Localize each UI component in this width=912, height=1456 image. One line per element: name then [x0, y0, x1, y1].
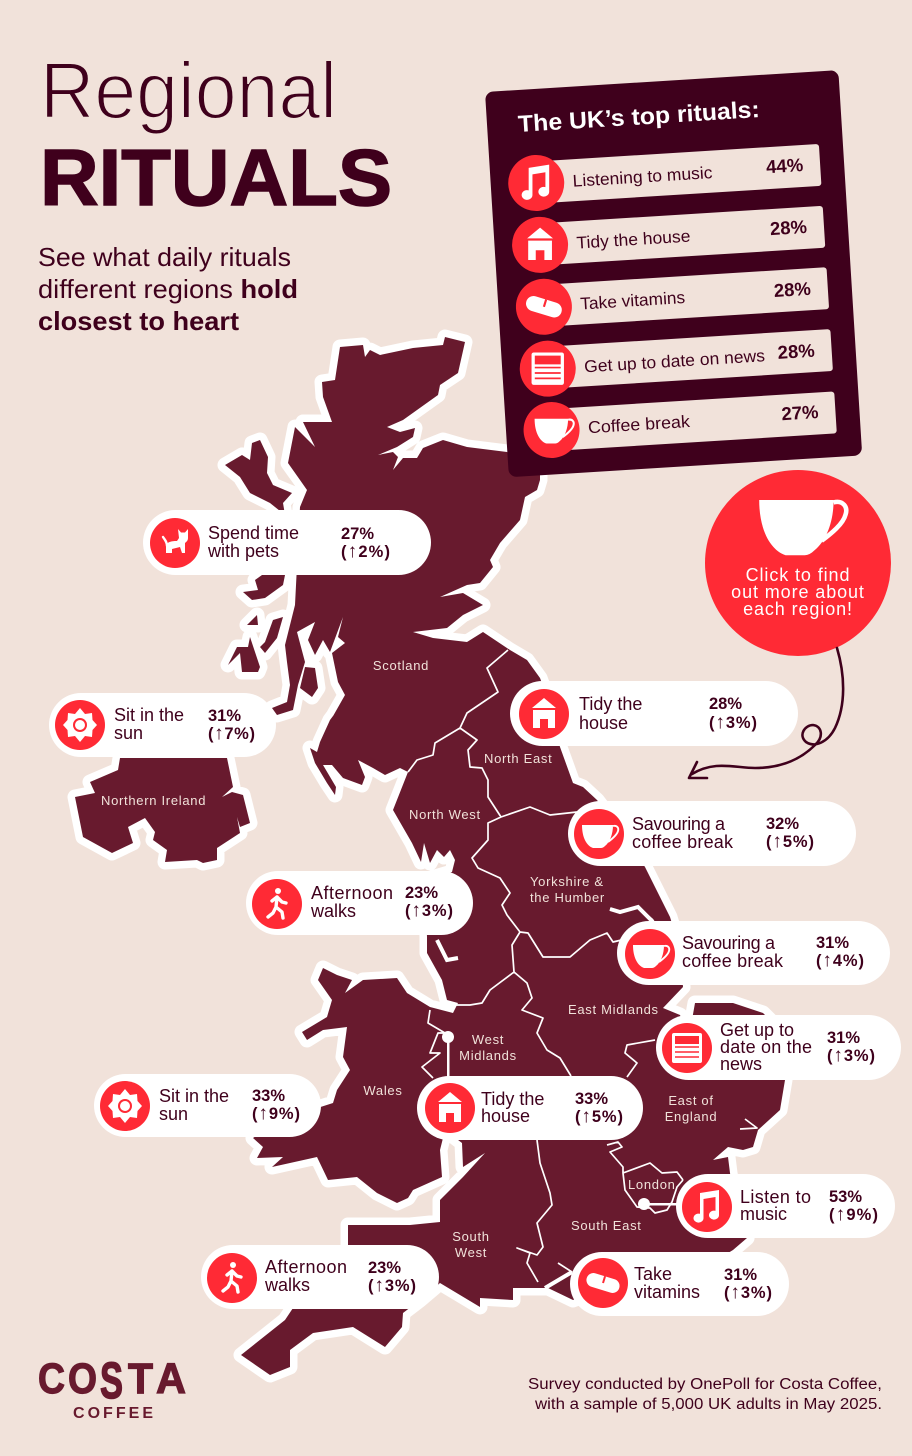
callout: Yorkshire savouring a coffee break: coffee break — [632, 832, 734, 852]
callout: West Midlands tidy the house: 33% — [575, 1090, 608, 1108]
region labels: England — [665, 1109, 717, 1124]
callout: Yorkshire savouring a coffee break: Savouring a — [632, 814, 726, 834]
callout: South East take vitamins — [570, 1252, 789, 1316]
callout: Yorkshire savouring a coffee break — [568, 801, 856, 866]
callout: Yorkshire savouring a coffee break: 32% — [766, 815, 799, 833]
callout: click to find out more: Click to find — [746, 565, 850, 585]
callout: Northern Ireland sit in the sun — [49, 693, 276, 757]
callout: East of England get up to date: (↑3%) — [827, 1045, 875, 1066]
row: get up to date on news: 28% — [777, 340, 815, 363]
callout: Scotland spend time with pets: 27% — [341, 525, 374, 543]
row: take vitamins: 28% — [773, 278, 811, 301]
callout: London listen to music — [676, 1174, 895, 1238]
callout: East Midlands savouring a coffee break: 31% — [816, 934, 849, 952]
callout: East of England get up to date: news — [720, 1054, 762, 1074]
row: get up to date on news: Get up to date on news — [584, 346, 765, 376]
row: coffee break: 27% — [781, 401, 819, 424]
row: take vitamins: Take vitamins — [580, 288, 686, 313]
callout: London listen to music: (↑9%) — [829, 1204, 878, 1225]
callout: click to find out more: each region! — [743, 599, 853, 619]
region labels: the Humber — [530, 890, 605, 905]
callout: North West afternoon walks: walks — [310, 901, 356, 921]
logo: Costa Coffee: O — [68, 1356, 97, 1403]
callout: Northern Ireland sit in the sun: Sit in the — [114, 705, 184, 725]
callout: Scotland spend time with pets: Spend time — [208, 523, 299, 543]
callout: East of England get up to date: Get up to — [720, 1020, 794, 1040]
region labels: North East — [484, 751, 552, 766]
region labels — [101, 658, 717, 1260]
region labels: Wales — [363, 1083, 403, 1098]
logo: Costa Coffee — [38, 1352, 186, 1422]
UK map — [75, 337, 790, 1375]
callout: North West afternoon walks: Afternoon — [311, 883, 393, 903]
logo: Costa Coffee: COFFEE — [73, 1405, 153, 1422]
row: listening to music: 44% — [765, 154, 804, 177]
callout: Northern Ireland sit in the sun: (↑7%) — [208, 723, 255, 744]
callout: East Midlands savouring a coffee break: (↑4%) — [816, 950, 864, 971]
callout: North West afternoon walks — [246, 871, 473, 935]
callout: Wales sit in the sun — [94, 1074, 321, 1137]
callout: West Midlands tidy the house: (↑5%) — [575, 1106, 623, 1127]
callout: South East take vitamins: (↑3%) — [724, 1282, 772, 1303]
callout: West Midlands tidy the house: Tidy the — [481, 1089, 544, 1109]
callout: West Midlands tidy the house — [417, 1076, 643, 1140]
callout: click to find out more: out more about — [731, 582, 865, 602]
logo: Costa Coffee: S — [100, 1352, 123, 1409]
title: RITUALS — [40, 133, 392, 222]
callout: Scotland spend time with pets: with pets — [207, 541, 279, 561]
region labels: North West — [409, 807, 481, 822]
callout: South West afternoon walks: Afternoon — [265, 1257, 347, 1277]
callout: London listen to music: music — [740, 1204, 787, 1224]
callout: South West afternoon walks: 23% — [368, 1259, 401, 1277]
title — [40, 46, 392, 222]
callout: East Midlands savouring a coffee break — [617, 921, 890, 985]
row: tidy the house — [510, 199, 826, 275]
row: listening to music: Listening to music — [572, 163, 714, 191]
region labels: Midlands — [459, 1048, 517, 1063]
connector: london dot — [638, 1198, 678, 1210]
callout: Wales sit in the sun: Sit in the — [159, 1086, 229, 1106]
callout: London listen to music: 53% — [829, 1188, 862, 1206]
survey note: Survey conducted by OnePoll for Costa Coffee, — [528, 1376, 882, 1393]
callout: South East take vitamins: 31% — [724, 1266, 757, 1284]
callout: North West afternoon walks: (↑3%) — [405, 900, 453, 921]
callout: Scotland spend time with pets — [143, 510, 431, 575]
region labels: London — [628, 1177, 676, 1192]
row: tidy the house: 28% — [769, 216, 808, 239]
callout: North East tidy the house: 28% — [709, 695, 742, 713]
callout: North East tidy the house: Tidy the — [579, 694, 642, 714]
callout: Northern Ireland sit in the sun: 31% — [208, 707, 241, 725]
callout: North East tidy the house: house — [579, 713, 628, 733]
panel heading: The UK’s top rituals: — [517, 96, 760, 137]
callout: South West afternoon walks — [201, 1245, 439, 1309]
region labels: West — [455, 1245, 487, 1260]
subtitle text block: different regions hold — [38, 274, 298, 304]
region labels: Yorkshire & — [530, 874, 604, 889]
row: take vitamins — [514, 261, 830, 336]
callout: Wales sit in the sun: 33% — [252, 1087, 285, 1105]
panel: top rituals — [485, 70, 862, 477]
callout: London listen to music: Listen to — [740, 1187, 811, 1207]
logo: Costa Coffee: C — [38, 1356, 65, 1403]
callout: East Midlands savouring a coffee break: Savouring a — [682, 933, 776, 953]
callout: North East tidy the house: (↑3%) — [709, 712, 757, 733]
subtitle text block — [38, 242, 298, 336]
row: get up to date on news — [518, 323, 833, 398]
callout: North West afternoon walks: 23% — [405, 884, 438, 902]
region labels: Northern Ireland — [101, 793, 206, 808]
callout: click to find out more — [705, 470, 891, 656]
subtitle text block: See what daily rituals — [38, 242, 291, 272]
callout: East of England get up to date: date on the — [720, 1037, 812, 1057]
row: coffee break: Coffee break — [587, 412, 691, 437]
callout: East Midlands savouring a coffee break: coffee break — [682, 951, 784, 971]
survey note: with a sample of 5,000 UK adults in May 2025. — [534, 1396, 882, 1413]
region labels: South East — [571, 1218, 642, 1233]
callout: South East take vitamins: vitamins — [634, 1282, 700, 1302]
callout: South West afternoon walks: walks — [264, 1275, 310, 1295]
callout: South West afternoon walks: (↑3%) — [368, 1275, 416, 1296]
row: coffee break — [522, 384, 837, 460]
callout: Wales sit in the sun: (↑9%) — [252, 1103, 300, 1124]
callout: Yorkshire savouring a coffee break: (↑5%) — [766, 831, 814, 852]
region labels: Scotland — [373, 658, 429, 673]
arrow — [689, 648, 843, 778]
callout: Northern Ireland sit in the sun: sun — [114, 723, 143, 743]
callout: Wales sit in the sun: sun — [159, 1104, 188, 1124]
logo: Costa Coffee: A — [156, 1356, 186, 1403]
region labels: West — [472, 1032, 504, 1047]
logo: Costa Coffee: T — [128, 1356, 153, 1403]
row: listening to music — [507, 137, 822, 213]
callout: West Midlands tidy the house: house — [481, 1106, 530, 1126]
callout: North East tidy the house — [510, 681, 798, 746]
callout: Scotland spend time with pets: (↑2%) — [341, 541, 390, 562]
connector: west midlands dot — [442, 1031, 454, 1077]
region labels: South — [452, 1229, 490, 1244]
callout: East of England get up to date: 31% — [827, 1029, 860, 1047]
region labels: East Midlands — [568, 1002, 659, 1017]
title: Regional — [40, 46, 337, 135]
region labels: East of — [668, 1093, 714, 1108]
callout: East of England get up to date — [656, 1015, 901, 1080]
row: tidy the house: Tidy the house — [576, 227, 691, 253]
subtitle text block: closest to heart — [38, 306, 239, 336]
callout: South East take vitamins: Take — [634, 1264, 672, 1284]
survey note — [528, 1376, 882, 1413]
